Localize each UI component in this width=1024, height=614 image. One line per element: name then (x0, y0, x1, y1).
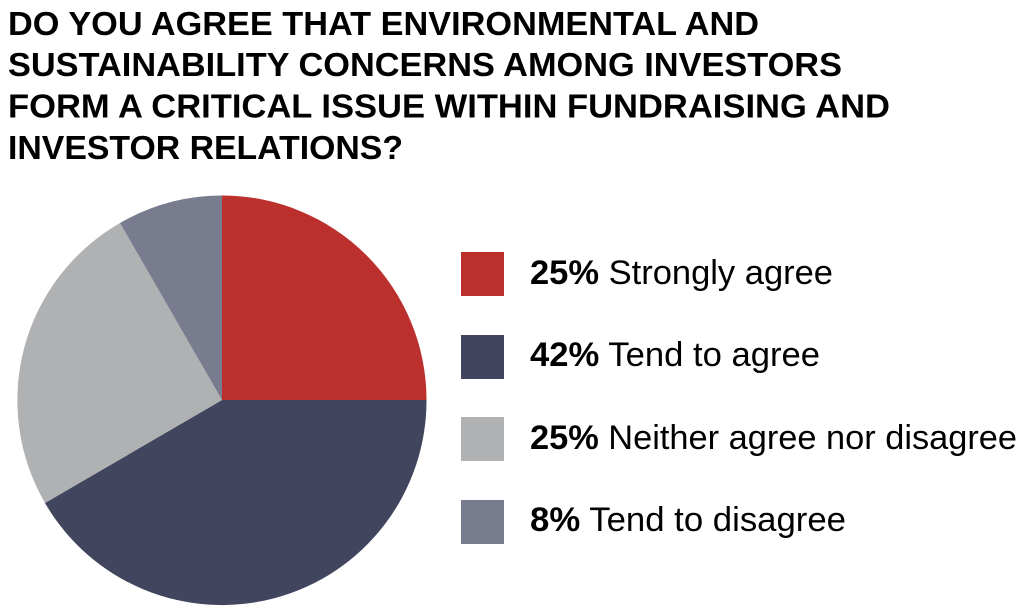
legend item: strongly agree: 25% Strongly agree (530, 254, 833, 292)
title: SUSTAINABILITY CONCERNS AMONG INVESTORS (8, 46, 842, 83)
legend item: tend to agree: 42% Tend to agree (530, 336, 820, 374)
title: DO YOU AGREE THAT ENVIRONMENTAL AND (8, 5, 759, 42)
slice: 42% tend to agree (45, 400, 427, 605)
legend item: neither agree nor disagree: 25% Neither agree nor disagree (530, 419, 1017, 457)
title: FORM A CRITICAL ISSUE WITHIN FUNDRAISING AND (8, 88, 890, 124)
slice: 25% neither agree nor disagree (17, 223, 222, 503)
slice: 8% tend to disagree (120, 196, 222, 400)
slice: 25% strongly agree (222, 196, 426, 400)
title: INVESTOR RELATIONS? (8, 129, 403, 166)
legend item: tend to disagree: 8% Tend to disagree (530, 501, 846, 539)
pie chart (17, 196, 427, 605)
legend item: tend to agree (461, 335, 820, 379)
title (8, 5, 890, 166)
legend (461, 252, 1017, 544)
